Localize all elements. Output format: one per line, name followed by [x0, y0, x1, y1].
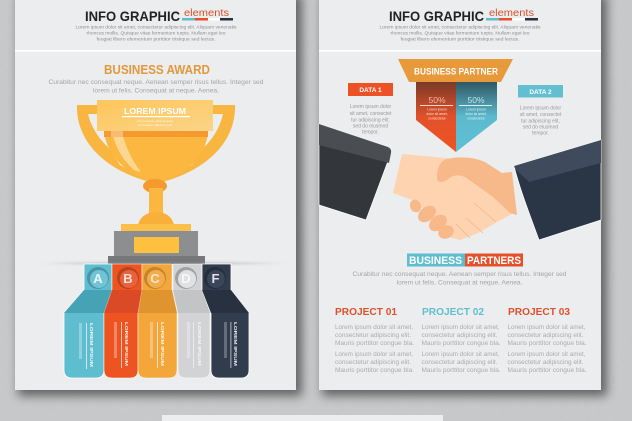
- column: project 03: Mauris porttitor congue bla.: [508, 341, 587, 347]
- chart: 50/50 split arrow: Lorem ipsum: [427, 108, 447, 112]
- poster header: info graphic elements: feugiat libero elementum porttitor tristique sed lectus.: [96, 36, 216, 42]
- label: data 1: DATA 1: [359, 87, 382, 94]
- ribbon C: C: [150, 271, 160, 286]
- poster header: info graphic elements: rhoncus mollis. Quisque vitae fermentum turpis. Nullam eget leo: [390, 30, 530, 36]
- text: award description: [48, 79, 264, 94]
- label: data 2: DATA 2: [529, 89, 552, 96]
- text: partners description: Curabitur nec consequat neque. Aenean semper risus tellus. Integer sed: [352, 271, 567, 278]
- banner: business partner: [398, 59, 513, 82]
- column: project 03: consectetur adipiscing elit.: [508, 360, 584, 366]
- column: project 01: Mauris porttitor congue bla.: [335, 368, 414, 374]
- dark hand: [437, 157, 517, 215]
- text: award description: lorem ut felis. Consequat at neque. Aenea.: [93, 88, 219, 94]
- poster header: info graphic elements: Lorem ipsum dolor sit amet, consectetur adipiscing elit. Aliquam venenatis: [380, 24, 541, 30]
- heading: business award: BUSINESS AWARD: [104, 63, 210, 77]
- ribbon D: [173, 264, 210, 378]
- trophy base: [114, 231, 198, 256]
- poster header: info graphic elements: [380, 8, 541, 42]
- chart: 50/50 split arrow: Lorem ipsum: [466, 108, 486, 112]
- chart: 50/50 split arrow: consectetur: [428, 116, 447, 120]
- ribbon A: LOREM IPSUM: [89, 323, 94, 367]
- poster header: info graphic elements: INFO GRAPHIC: [85, 8, 180, 24]
- chart: 50/50 split arrow: 50%: [467, 95, 485, 105]
- fingers: [408, 198, 456, 241]
- icon: trophy: consectetur adipiscing elit: [138, 123, 172, 127]
- column: project 01: Lorem ipsum dolor sit amet,: [335, 325, 413, 331]
- chart: 50/50 split arrow: [416, 82, 497, 152]
- ribbon D: LOREM IPSUM: [197, 322, 202, 366]
- label: data 2: [518, 85, 563, 98]
- text: award description: Curabitur nec consequat neque. Aenean semper risus tellus. Integer sed: [48, 79, 264, 86]
- panel: business partner poster: [319, 0, 607, 396]
- banner: business partner: BUSINESS PARTNER: [414, 66, 499, 76]
- ribbon B: [104, 264, 142, 378]
- text: partners description: [352, 271, 567, 286]
- ribbon C: [138, 264, 177, 378]
- column: project 01: Lorem ipsum dolor sit amet,: [335, 352, 413, 358]
- column: project 01: Mauris porttitor congue bla.: [335, 341, 414, 347]
- left sleeve: [319, 124, 391, 220]
- text: data 2 description: tur adipiscing elit,: [521, 118, 560, 124]
- text: data 1 description: Lorem ipsum dolor: [350, 104, 392, 110]
- ribbon B: B: [123, 271, 133, 286]
- ribbon A: A: [93, 271, 103, 286]
- right sleeve: [514, 140, 601, 240]
- text: data 1 description: tempor.: [362, 130, 379, 136]
- trophy label: [97, 100, 213, 131]
- column: project 02: consectetur adipiscing elit.: [422, 333, 498, 339]
- text: data 2 description: sit amet, consectet: [520, 112, 562, 118]
- trophy stem: [143, 179, 167, 193]
- column: project 01: PROJECT 01: [335, 306, 397, 318]
- text: data 1 description: tur adipiscing elit,: [351, 118, 390, 124]
- poster header: info graphic elements: Lorem ipsum dolor sit amet, consectetur adipiscing elit. Aliquam venenatis: [76, 24, 237, 30]
- text: partners description: lorem ut felis. Consequat at neque. Aenea.: [396, 280, 523, 286]
- panel: third poster peeking at bottom: [162, 415, 443, 421]
- text: data 2 description: [520, 106, 562, 136]
- column: project 03: Mauris porttitor congue bla.: [508, 368, 587, 374]
- text: data 1 description: sed do eiusmod: [353, 124, 388, 130]
- column: project 01: consectetur adipiscing elit.: [335, 360, 411, 366]
- text: data 2 description: tempor.: [532, 130, 549, 136]
- column: project 02: Mauris porttitor congue bla.: [422, 368, 501, 374]
- ribbon D: D: [181, 271, 191, 286]
- column: project 03: PROJECT 03: [508, 306, 570, 318]
- trophy handles: [77, 105, 150, 182]
- poster header: info graphic elements: elements: [489, 8, 534, 19]
- icon: trophy: Lorem ipsum dolor sit amet: [137, 119, 173, 123]
- icon: trophy: LOREM IPSUM: [124, 106, 186, 116]
- finger creases: [456, 203, 496, 238]
- heading: business partners: BUSINESS: [409, 255, 462, 267]
- column: project 03: Lorem ipsum dolor sit amet,: [508, 325, 586, 331]
- shadow line under trophy: [40, 262, 285, 264]
- ribbon F: F: [212, 271, 220, 286]
- ribbon F: LOREM IPSUM: [233, 322, 238, 366]
- column: project 02: Mauris porttitor congue bla.: [422, 341, 501, 347]
- column: project 01: [335, 306, 414, 374]
- column: project 02: consectetur adipiscing elit.: [422, 360, 498, 366]
- panel: business award poster: [15, 0, 302, 396]
- text: data 2 description: sed do eiusmod: [523, 124, 558, 130]
- text: data 1 description: sit amet, consectet: [350, 111, 392, 117]
- ribbon C: LOREM IPSUM: [160, 322, 165, 366]
- column: project 03: [508, 306, 587, 374]
- ribbon chart: five option tabs: [64, 264, 249, 378]
- heading: business partners: [407, 254, 523, 267]
- column: project 02: Lorem ipsum dolor sit amet,: [422, 325, 500, 331]
- heading: business partners: PARTNERS: [467, 255, 521, 267]
- poster header: info graphic elements: elements: [184, 8, 229, 19]
- poster header: info graphic elements: feugiat libero elementum porttitor tristique sed lectus.: [400, 36, 520, 42]
- column: project 02: PROJECT 02: [422, 306, 484, 318]
- ribbon A: [64, 264, 112, 378]
- poster header: info graphic elements: INFO GRAPHIC: [389, 8, 484, 24]
- light hand: [393, 154, 512, 240]
- poster header: info graphic elements: rhoncus mollis. Quisque vitae fermentum turpis. Nullam eget leo: [86, 30, 226, 36]
- chart: 50/50 split arrow: 50%: [428, 95, 446, 105]
- ribbon F: [202, 264, 249, 378]
- chart: 50/50 split arrow: dolor sit amet,: [426, 112, 448, 116]
- column: project 03: Lorem ipsum dolor sit amet,: [508, 352, 586, 358]
- chart: 50/50 split arrow: dolor sit amet,: [465, 112, 487, 116]
- icon: trophy: [77, 100, 235, 264]
- column: project 01: consectetur adipiscing elit.: [335, 333, 411, 339]
- chart: 50/50 split arrow: consectetur: [467, 116, 486, 120]
- ribbon B: LOREM IPSUM: [124, 322, 129, 366]
- column: project 02: Lorem ipsum dolor sit amet,: [422, 352, 500, 358]
- text: data 1 description: [350, 104, 392, 136]
- column: project 02: [422, 306, 501, 374]
- text: data 2 description: Lorem ipsum dolor: [520, 106, 562, 112]
- poster header: info graphic elements: [76, 8, 237, 42]
- label: data 1: [348, 83, 393, 96]
- illustration: handshake: [319, 124, 601, 241]
- column: project 03: consectetur adipiscing elit.: [508, 333, 584, 339]
- trophy cup: [104, 131, 208, 183]
